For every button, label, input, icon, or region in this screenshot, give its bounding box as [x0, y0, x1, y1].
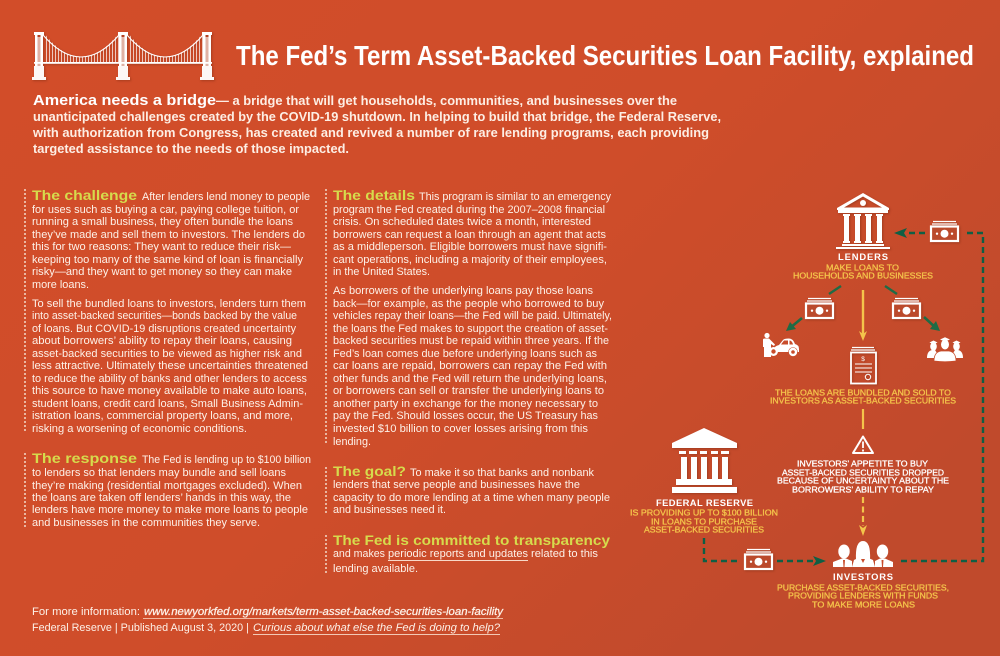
text: investors appetite: ASSET-BACKED SECURITIES DROPPED — [782, 468, 944, 478]
arrow: appetite to investors — [859, 497, 867, 536]
text: loans bundled — [770, 388, 956, 406]
arrow: lenders to bundled loans — [859, 290, 867, 341]
panel: the challenge: asset-backed securities to be viewed as higher risk and — [32, 348, 302, 360]
heading: the details: The details — [333, 188, 415, 204]
panel: the challenge — [25, 188, 310, 435]
panel: transparency: related to this — [531, 548, 598, 560]
intro text: America needs a bridge — [33, 93, 216, 109]
icon: warning triangle — [853, 436, 873, 453]
label: investors: INVESTORS — [833, 571, 893, 582]
panel: the challenge: less attractive. Ultimately these uncertainties threatened — [32, 360, 308, 372]
panel: the details: car loans are repaid, borrowers can repay the Fed with — [333, 360, 607, 372]
text: make loans: MAKE LOANS TO — [826, 262, 899, 272]
icon: money right — [893, 298, 920, 318]
panel: the details: lending. — [333, 436, 371, 448]
text: investors appetite — [777, 458, 949, 494]
arrow: to car borrower — [786, 318, 802, 331]
panel: the details: another party in exchange for the money necessary to — [333, 398, 598, 410]
label: federal reserve: FEDERAL RESERVE — [656, 497, 753, 508]
panel: the details: backed securities must be repaid within three years. If the — [333, 335, 609, 347]
panel: the challenge: into asset-backed securities—bonds backed by the value — [32, 310, 297, 322]
icon: federal reserve building — [672, 428, 737, 493]
intro text: with authorization from Congress, has created and revived a number of rare lending programs, each providing — [32, 126, 709, 140]
panel: the challenge: this for two reasons: They want to reduce their risk— — [32, 241, 291, 253]
panel: the details: vehicles repay their loans—the Fed will be paid. Ultimately, — [333, 310, 612, 322]
text: investors appetite: INVESTORS’ APPETITE TO BUY — [797, 458, 928, 468]
icon: bundled document: $ — [861, 356, 865, 363]
panel: the challenge: of loans. But COVID-19 disruptions created uncertainty — [32, 323, 297, 335]
arrow: investors back to lenders money — [901, 233, 983, 561]
panel: the response: the loans are taken off lenders’ hands in this way, the — [32, 492, 291, 504]
panel: the details: program the Fed created during the 2007–2008 financial — [333, 204, 605, 216]
panel: the details: invested $10 billion to cover losses arising from this — [333, 423, 588, 435]
panel: the details — [326, 188, 612, 448]
panel: the details: other funds and the Fed will return the underlying loans, — [333, 373, 607, 385]
text: investors purchase — [777, 582, 949, 610]
icon: person with car — [763, 333, 799, 357]
panel: the response: and businesses in the communities they serve. — [32, 517, 260, 529]
panel: the challenge: student loans, credit card loans, Small Business Admin- — [32, 398, 303, 410]
panel: transparency: and makes — [333, 548, 385, 560]
text: loans bundled: INVESTORS AS ASSET-BACKED SECURITIES — [770, 396, 956, 406]
intro text — [32, 93, 721, 156]
panel: the response: they’re making (residential mortgages excluded). When — [32, 480, 302, 492]
arrow: to graduates — [924, 317, 940, 331]
icon: suspension bridge — [32, 32, 214, 80]
icon: money left — [806, 298, 833, 318]
panel: the challenge: After lenders lend money to people — [142, 191, 310, 203]
intro text: unanticipated challenges created by the COVID-19 shutdown. In helping to build that bridge, the Federal Reserve, — [33, 110, 721, 124]
panel: the challenge: running a small business, they often bundle the loans — [32, 216, 293, 228]
panel: the challenge: risking a worsening of economic conditions. — [32, 423, 247, 435]
panel: the challenge: for uses such as buying a car, paying college tuition, or — [32, 204, 299, 216]
text: investors purchase: PROVIDING LENDERS WITH FUNDS — [788, 590, 938, 600]
panel: the details: cant operations, including a majority of their employees, — [333, 254, 607, 266]
panel: transparency — [326, 533, 610, 575]
panel: the details: This program is similar to an emergency — [419, 191, 612, 203]
icon: money fed — [745, 550, 772, 569]
panel: the challenge: istration loans, commercial property loans, and more, — [32, 410, 293, 422]
label: lenders: LENDERS — [838, 251, 888, 262]
panel: the goal: capacity to do more lending at a time when many people — [333, 492, 610, 504]
text: investors appetite: BECAUSE OF UNCERTAINTY ABOUT THE — [777, 476, 949, 486]
panel: the goal: and businesses need it. — [333, 504, 446, 516]
panel: the challenge: they’ve made and sell them to investors. The lenders do — [32, 229, 305, 241]
icon: graduates — [927, 337, 963, 362]
heading: the challenge: The challenge — [32, 188, 137, 204]
panel: the response — [25, 451, 311, 529]
icon: bundled document — [851, 348, 876, 384]
icon: investors — [833, 541, 893, 567]
arrow: lenders to students bill — [885, 286, 897, 294]
panel: the details: back—for example, as the people who borrowed to buy — [333, 298, 605, 310]
intro text: — a bridge that will get households, communities, and businesses over the — [216, 94, 677, 108]
arrow: money to lenders — [894, 228, 925, 238]
heading: the goal: The goal? — [333, 464, 406, 480]
footer: sources: Federal Reserve | Published August 3, 2020 | — [32, 622, 249, 634]
footer: sources: For more information: — [32, 606, 140, 618]
panel: the details: Fed’s loan comes due before underlying loans such as — [333, 348, 597, 360]
heading: transparency: The Fed is committed to transparency — [333, 533, 610, 549]
panel: the response: lenders have more money to make more loans to people — [32, 504, 308, 516]
panel: the challenge: this source to have money available to make auto loans, — [32, 385, 307, 397]
panel: the challenge: more loans. — [32, 279, 89, 291]
text: make loans — [793, 262, 933, 280]
text: federal reserve provides — [630, 508, 778, 534]
text: federal reserve provides: IN LOANS TO PURCHASE — [651, 516, 757, 526]
panel: the challenge: risky—and they want to get money so they can make — [32, 266, 292, 278]
intro text: targeted assistance to the needs of those impacted. — [33, 142, 349, 156]
text: investors appetite: BORROWERS’ ABILITY TO REPAY — [792, 484, 934, 494]
panel: the details: as a middleperson. Eligible borrowers must have signifi- — [333, 241, 607, 253]
panel: the details: in the United States. — [333, 266, 430, 278]
footer: sources: www.newyorkfed.org/markets/term-asset-backed-securities-loan-facility — [144, 606, 504, 618]
panel: transparency: periodic reports and updates — [388, 548, 528, 560]
panel: transparency: lending available. — [333, 563, 418, 575]
panel: the details: crisis. On scheduled dates twice a month, interested — [333, 216, 591, 228]
text: investors purchase: PURCHASE ASSET-BACKED SECURITIES, — [777, 582, 949, 592]
text: federal reserve provides: ASSET-BACKED SECURITIES — [644, 524, 764, 534]
panel: the details: As borrowers of the underlying loans pay those loans — [333, 285, 593, 297]
text: loans bundled: THE LOANS ARE BUNDLED AND SOLD TO — [775, 388, 951, 398]
arrow: money to investors — [777, 556, 826, 566]
arrow: fed to money — [704, 538, 740, 561]
panel: the details: borrowers can request a loan through an agent that acts — [333, 229, 606, 241]
panel: the goal: lenders that serve people and businesses have the — [333, 479, 580, 491]
panel: the response: The Fed is lending up to $100 billion — [142, 454, 311, 466]
text: investors purchase: TO MAKE MORE LOANS — [812, 600, 915, 610]
panel: the challenge: keeping too many of the same kind of loan is financially — [32, 254, 304, 266]
footer: sources: Curious about what else the Fed is doing to help? — [253, 622, 500, 634]
text: make loans: HOUSEHOLDS AND BUSINESSES — [793, 270, 933, 280]
panel: the goal — [326, 464, 610, 516]
panel: the challenge: to reduce the ability of banks and other lenders to access — [32, 373, 307, 385]
heading: the response: The response — [32, 451, 137, 467]
arrow: lenders to car loan bill — [829, 286, 841, 294]
icon: lenders bank building — [836, 193, 890, 249]
panel: the challenge: about borrowers’ ability to repay their loans, causing — [32, 335, 292, 347]
panel: the goal: To make it so that banks and nonbank — [410, 467, 595, 479]
footer: sources — [32, 606, 504, 634]
arrow: bundled to warning — [862, 409, 864, 429]
panel: the challenge: To sell the bundled loans to investors, lenders turn them — [32, 298, 306, 310]
text: federal reserve provides: IS PROVIDING UP TO $100 BILLION — [630, 508, 778, 518]
panel: the details: the loans the Fed makes to support the creation of asset- — [333, 323, 608, 335]
panel: the details: or borrowers can sell or transfer the underlying loans to — [333, 385, 604, 397]
panel: the response: to lenders so that lenders may bundle and sell loans — [32, 467, 286, 479]
panel: the details: pay the Fed. Should losses occur, the US Treasury has — [333, 410, 598, 422]
icon: money top right — [931, 222, 958, 241]
